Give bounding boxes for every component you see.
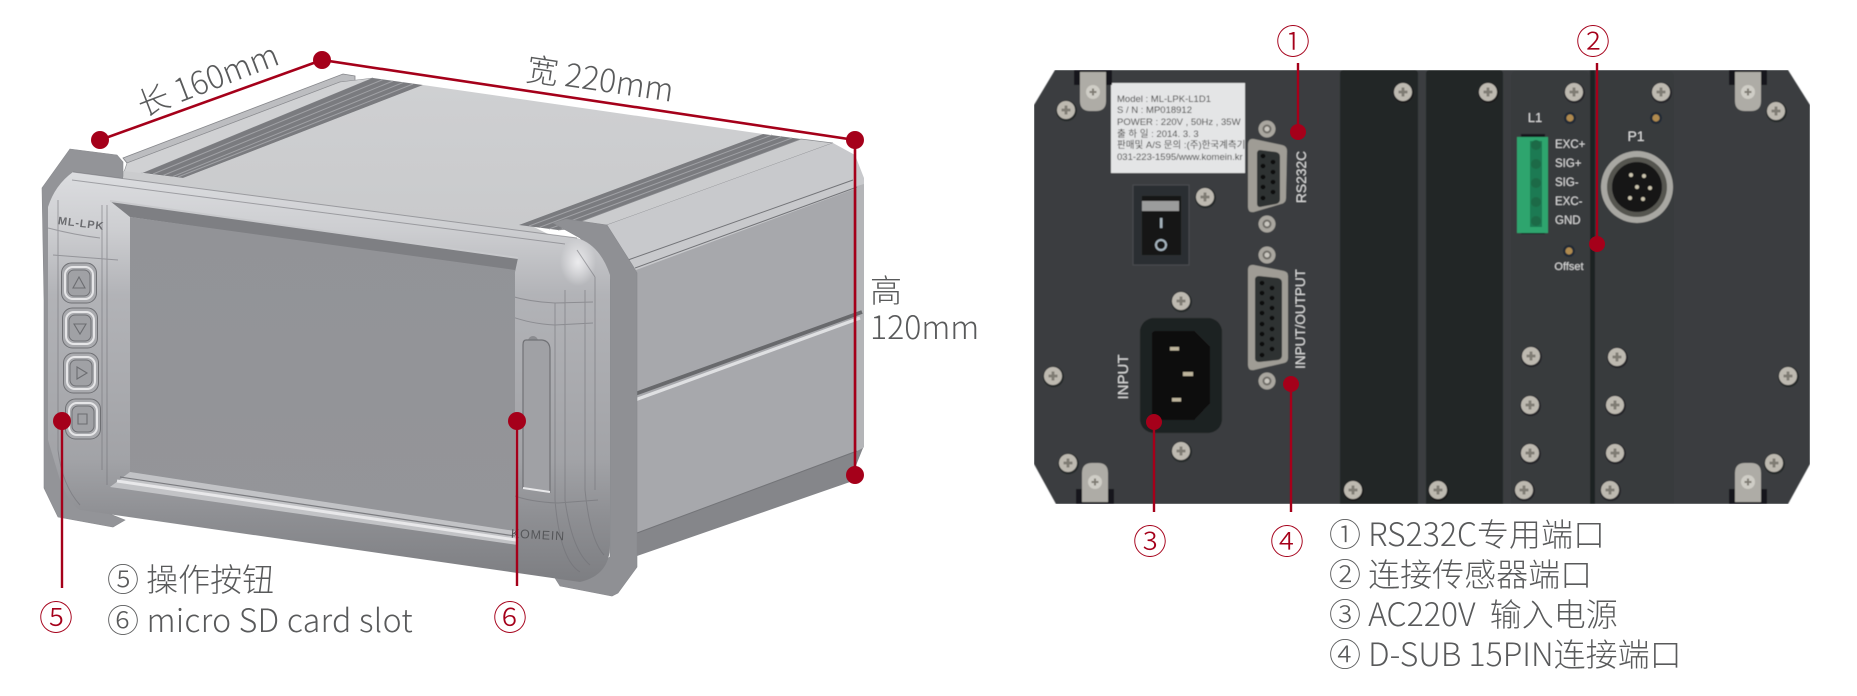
product label: Model : ML-LPK-L1D1 <box>1117 94 1211 105</box>
model label: ML-LPK <box>57 215 105 233</box>
front bezel <box>48 172 610 582</box>
legend: rear panel <box>1329 510 1682 676</box>
micro SD card slot <box>523 336 550 492</box>
blank slot covers <box>1340 70 1503 504</box>
module L1 <box>1511 70 1595 504</box>
module L1: GND <box>1555 215 1581 227</box>
right heat sink vent <box>519 134 801 230</box>
side panel upper band <box>607 143 864 272</box>
legend: rear panel: ④ D-SUB 15PIN连接端口 <box>1329 630 1682 676</box>
left heat sink vent <box>143 78 423 178</box>
callout 6 <box>493 412 527 640</box>
screen top bevel <box>110 201 518 272</box>
callout 1: ① <box>1276 15 1310 64</box>
groove <box>635 312 862 394</box>
legend: front panel <box>107 555 413 642</box>
dimension: height: 120mm <box>870 303 979 349</box>
callout 3 <box>1133 414 1167 564</box>
legend: front panel: ⑥ micro SD card slot <box>107 596 413 642</box>
module L1: Offset <box>1554 261 1584 273</box>
callout 4: ④ <box>1270 515 1304 564</box>
module P1: P1 <box>1627 128 1645 144</box>
product illustration: front view of the device <box>42 74 864 596</box>
panel screws <box>1043 82 1799 501</box>
RS232C port <box>1248 120 1309 232</box>
product label <box>1111 83 1245 173</box>
input output port <box>1248 246 1308 390</box>
dimension: length: 长 160mm <box>130 30 285 126</box>
AC power inlet: INPUT <box>1115 354 1132 400</box>
AC power inlet <box>1115 318 1222 433</box>
callout 1 <box>1276 15 1310 140</box>
callout 4 <box>1270 376 1304 564</box>
module L1: SIG- <box>1555 177 1579 189</box>
product label: 판매및 A/S 문의 :(주)한국계측기 <box>1117 139 1245 151</box>
product label: 031-223-1595/www.komein.kr <box>1117 152 1243 163</box>
module L1: L1 <box>1528 110 1542 125</box>
operation buttons <box>62 263 100 439</box>
module L1: EXC+ <box>1555 139 1586 151</box>
callout 5 <box>39 412 73 640</box>
legend: front panel: ⑤ 操作按钮 <box>107 555 274 601</box>
power switch <box>1133 185 1189 265</box>
right end plate <box>553 219 637 596</box>
product label: POWER : 220V , 50Hz , 35W <box>1117 117 1241 128</box>
RS232C port: RS232C <box>1294 151 1309 203</box>
product label: 출 하 일 : 2014. 3. 3 <box>1117 128 1199 140</box>
module P1 <box>1595 71 1674 504</box>
legend: rear panel: ② 连接传感器端口 <box>1329 550 1592 596</box>
screen bottom bevel <box>110 472 518 545</box>
rear panel photo <box>1034 70 1810 504</box>
dimension: height: 高 <box>870 266 902 312</box>
callout 2 <box>1576 15 1610 252</box>
callout 5: ⑤ <box>39 591 73 640</box>
left rear rails <box>123 74 373 175</box>
product label: S / N : MP018912 <box>1117 105 1192 116</box>
green terminal <box>1517 134 1548 234</box>
side panel <box>628 180 864 556</box>
callout 6: ⑥ <box>493 591 527 640</box>
brand label: KOMEIN <box>511 527 565 543</box>
screen <box>130 217 515 531</box>
panel body <box>1034 70 1810 504</box>
legend: rear panel: ③ AC220V 输入电源 <box>1329 590 1618 636</box>
module L1: EXC- <box>1555 196 1583 208</box>
module L1: SIG+ <box>1555 158 1582 170</box>
dimension: height <box>870 266 979 349</box>
callout 3: ③ <box>1133 515 1167 564</box>
legend: rear panel: ① RS232C专用端口 <box>1329 510 1605 556</box>
input output port: INPUT/OUTPUT <box>1293 269 1308 369</box>
top cover <box>110 85 763 245</box>
right rear rail <box>558 139 833 230</box>
left end plate <box>42 149 125 527</box>
dimension lines with markers <box>91 51 864 484</box>
dimension: width: 宽 220mm <box>524 44 677 112</box>
callout 2: ② <box>1576 15 1610 64</box>
mounting clips <box>1074 70 1767 504</box>
